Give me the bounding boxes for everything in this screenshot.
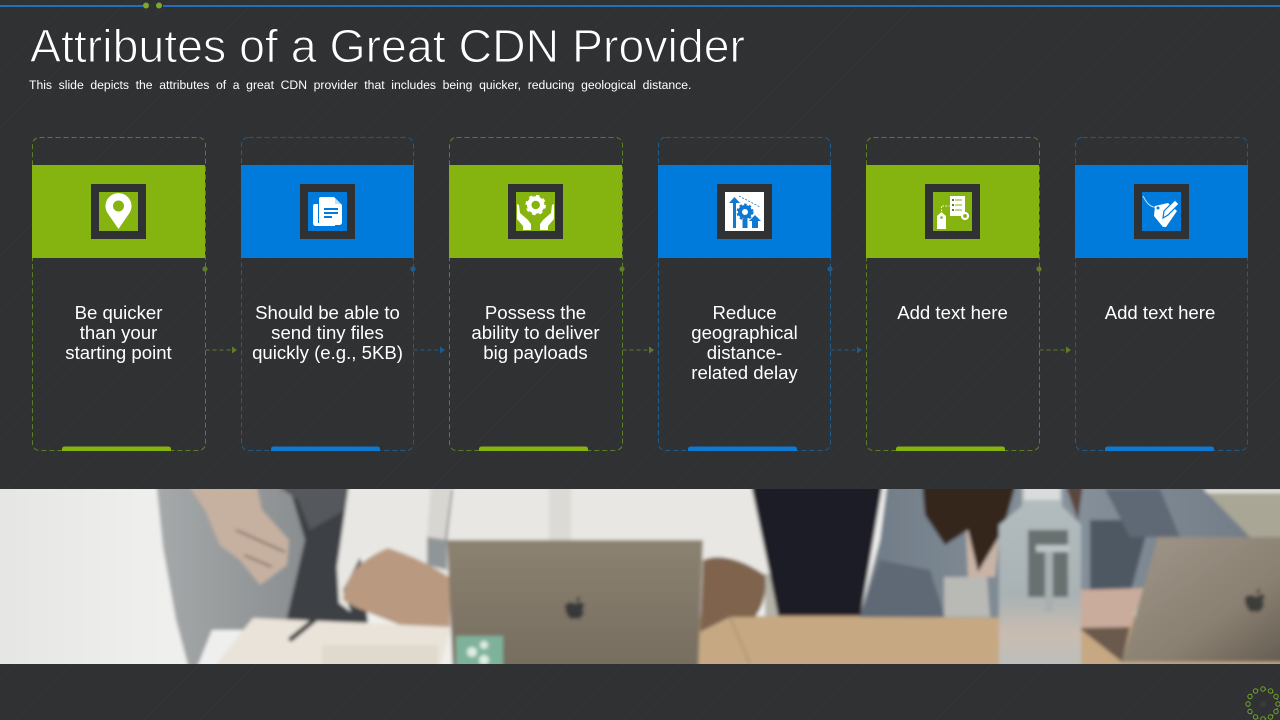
text: geographical delay: distance- (707, 342, 782, 363)
photo: team at laptops (0, 489, 1280, 664)
icon: hands holding gear (517, 196, 554, 230)
text: add text six: Add text here (1105, 302, 1215, 323)
icon: tag and checklist (937, 196, 968, 229)
text: big payloads: Possess the (485, 302, 586, 323)
corner ring ornament (1246, 687, 1280, 720)
subtitle: This slide depicts the attributes of a great CDN provider that includes being quicker, reducing geological distance. (29, 78, 691, 92)
text: be quicker: starting point (65, 342, 173, 363)
text: geographical delay: Reduce (712, 302, 777, 323)
text: geographical delay: related delay (691, 362, 798, 383)
panel: geographical delay (658, 138, 833, 451)
icon: documents (313, 197, 342, 226)
icon: location pin (106, 193, 132, 229)
panel: big payloads (449, 138, 625, 451)
title: Attributes of a Great CDN Provider (30, 20, 745, 72)
icon: growth arrows with gear (729, 196, 761, 228)
arrow: third to fourth (622, 346, 654, 354)
text: tiny files: Should be able to (255, 302, 400, 323)
panel: be quicker (32, 138, 208, 451)
panel: tiny files (241, 138, 416, 451)
icon: tag and pencil (1143, 196, 1179, 227)
text: be quicker: Be quicker (75, 302, 162, 323)
arrow: first to second (206, 346, 237, 354)
panel: add text five (866, 138, 1042, 451)
arrow: second to third (414, 346, 445, 354)
text: geographical delay: geographical (691, 322, 798, 343)
text: tiny files: send tiny files (271, 322, 384, 343)
text: big payloads: ability to deliver (471, 322, 600, 343)
top rule with dots (0, 2, 1280, 8)
text: big payloads: big payloads (483, 342, 588, 363)
arrow: fifth to sixth (1040, 346, 1071, 354)
text: be quicker: than your (80, 322, 157, 343)
arrow: fourth to fifth (830, 346, 862, 354)
text: tiny files: quickly (e.g., 5KB) (252, 342, 403, 363)
text: add text five: Add text here (897, 302, 1008, 323)
panel: add text six (1075, 138, 1248, 451)
